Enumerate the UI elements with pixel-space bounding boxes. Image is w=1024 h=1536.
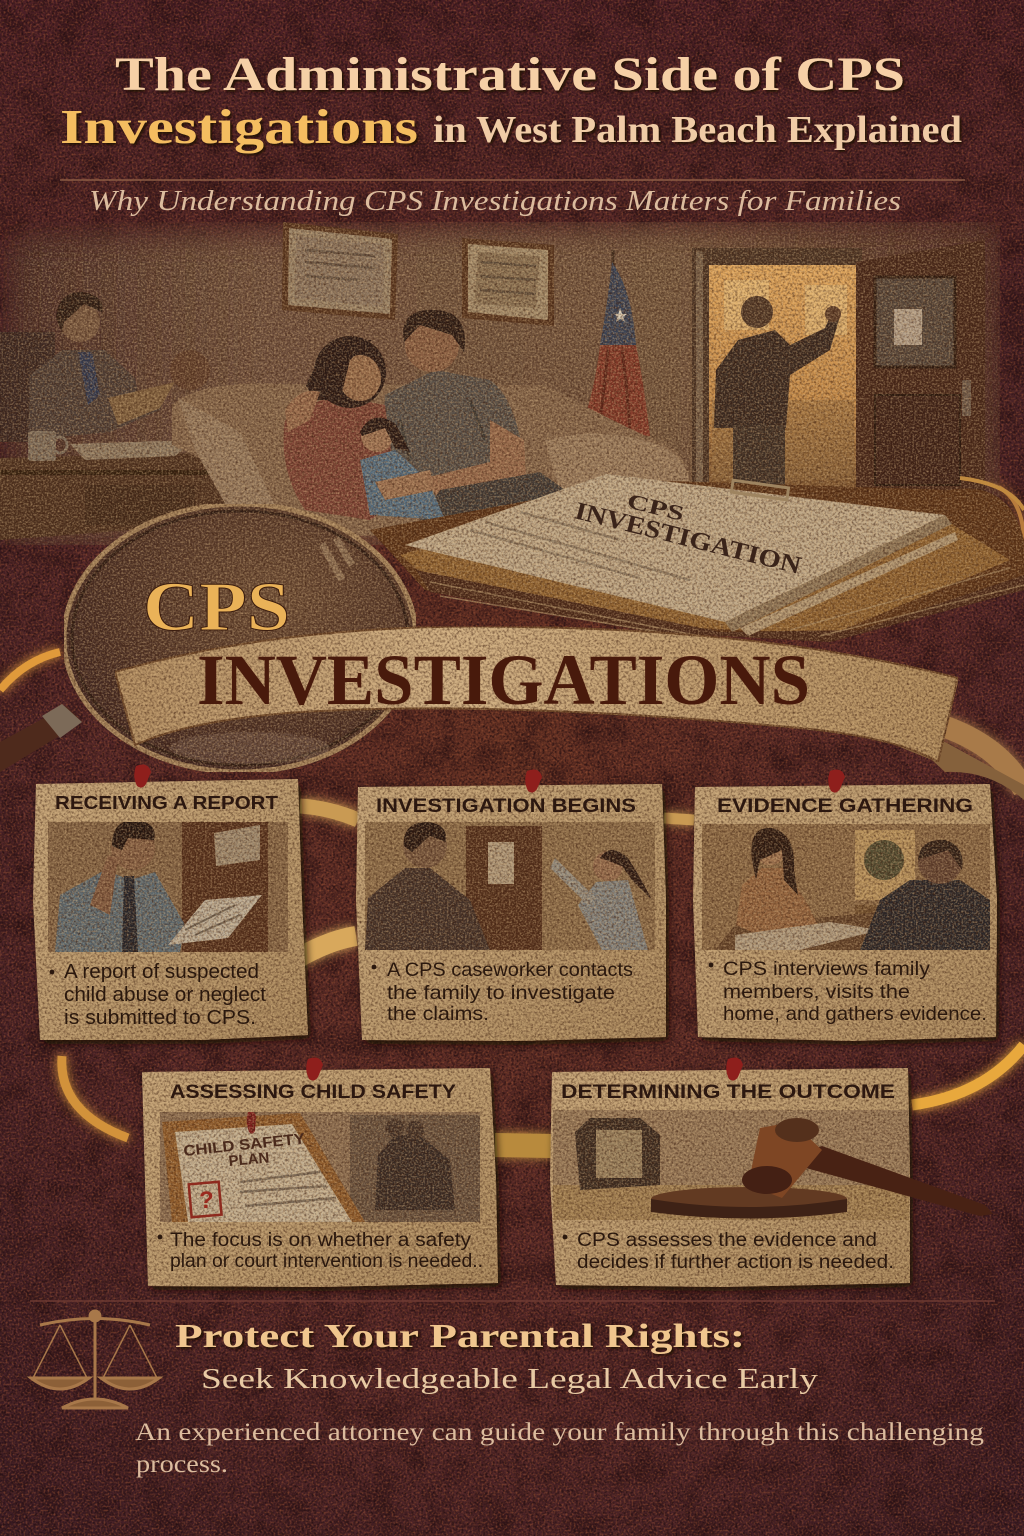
pushpin — [134, 764, 151, 788]
card text — [372, 959, 633, 1025]
card image: CHILD SAFETY — [183, 1130, 306, 1160]
card text — [563, 1230, 894, 1273]
card: receiving a report — [33, 764, 308, 1040]
card title: EVIDENCE GATHERING — [717, 796, 973, 817]
card image — [160, 1111, 480, 1222]
card image: PLAN — [228, 1149, 270, 1170]
card text: the claims. — [387, 1003, 489, 1025]
pushpin — [828, 769, 845, 793]
card paper — [33, 779, 308, 1040]
closing note: An experienced attorney can guide your family through this challenging — [135, 1419, 985, 1446]
document label: INVESTIGATION — [572, 498, 804, 580]
footer divider — [30, 1300, 995, 1302]
desk with mug and papers — [0, 431, 235, 540]
open door and lit room — [692, 240, 985, 492]
card image: ? — [199, 1187, 214, 1214]
card text — [50, 961, 266, 1029]
card image — [553, 1110, 909, 1220]
card text: The focus is on whether a safety — [170, 1230, 472, 1251]
title line 2 accent: Investigations — [60, 99, 418, 154]
card: investigation begins — [356, 769, 666, 1041]
card title: DETERMINING THE OUTCOME — [561, 1082, 895, 1103]
clip — [731, 480, 789, 500]
sound block — [651, 1187, 847, 1218]
magnifying glass — [0, 504, 416, 772]
card text — [158, 1230, 483, 1272]
office wall — [10, 225, 1000, 545]
framed certificate right — [462, 238, 554, 326]
flag — [580, 250, 650, 437]
title line 1: The Administrative Side of CPS — [115, 48, 905, 101]
handle — [0, 706, 82, 772]
illustration: office scene with family — [0, 222, 1000, 545]
man with papers at left — [0, 292, 210, 442]
family huddled on sofa — [284, 310, 565, 520]
card image — [48, 820, 288, 952]
card title: INVESTIGATION BEGINS — [376, 796, 636, 817]
card image — [365, 822, 655, 950]
card text: A CPS caseworker contacts — [387, 959, 633, 981]
card paper — [142, 1068, 498, 1287]
card text: is submitted to CPS. — [64, 1007, 256, 1029]
banner: CPS investigations — [115, 627, 1024, 800]
closing note — [135, 1419, 985, 1478]
card text: CPS interviews family — [723, 958, 930, 980]
icon: scales of justice — [31, 1310, 159, 1408]
banner lettering: INVESTIGATIONS — [197, 640, 810, 720]
framed certificate left — [282, 222, 398, 320]
father — [380, 310, 565, 520]
folder and papers — [370, 474, 1024, 642]
card text: decides if further action is needed. — [577, 1252, 894, 1273]
banner ribbon — [115, 627, 958, 762]
call to action subheading: Seek Knowledgeable Legal Advice Early — [201, 1363, 819, 1395]
CPS lettering: CPS — [143, 569, 290, 646]
pushpin — [306, 1057, 323, 1081]
document label: CPS — [625, 489, 687, 526]
card image — [702, 824, 990, 950]
card: assessing child safety — [142, 1057, 498, 1287]
card text: child abuse or neglect — [64, 984, 266, 1006]
card text: CPS assesses the evidence and — [577, 1230, 877, 1251]
closing note: process. — [136, 1451, 228, 1478]
card: evidence gathering — [693, 769, 997, 1041]
card text — [709, 958, 987, 1025]
glowing ribbons behind the cards — [0, 482, 1024, 1146]
banner tail — [870, 735, 1024, 800]
lens — [64, 504, 416, 772]
card paper — [693, 784, 997, 1041]
card: determining the outcome — [550, 1057, 993, 1287]
call to action — [175, 1318, 819, 1395]
child — [360, 418, 445, 520]
case file stack — [370, 474, 1024, 642]
card paper — [356, 784, 666, 1041]
pushpin — [726, 1057, 743, 1081]
title line 2 remainder: in West Palm Beach Explained — [433, 109, 962, 151]
man knocking at door — [714, 296, 841, 485]
call to action heading: Protect Your Parental Rights: — [175, 1318, 745, 1355]
card text: the family to investigate — [387, 982, 615, 1004]
mother — [284, 336, 420, 520]
card text: members, visits the — [723, 981, 910, 1003]
card text: A report of suspected — [64, 961, 259, 983]
card paper — [550, 1068, 910, 1287]
card text: home, and gathers evidence. — [723, 1003, 987, 1025]
gavel — [742, 1118, 993, 1216]
pushpin — [525, 769, 542, 793]
card title: RECEIVING A REPORT — [55, 792, 279, 813]
subtitle: Why Understanding CPS Investigations Matters for Families — [89, 186, 901, 217]
title — [60, 48, 962, 154]
card title: ASSESSING CHILD SAFETY — [170, 1082, 456, 1103]
sofa — [172, 383, 690, 540]
card text: plan or court intervention is needed.. — [170, 1251, 483, 1272]
